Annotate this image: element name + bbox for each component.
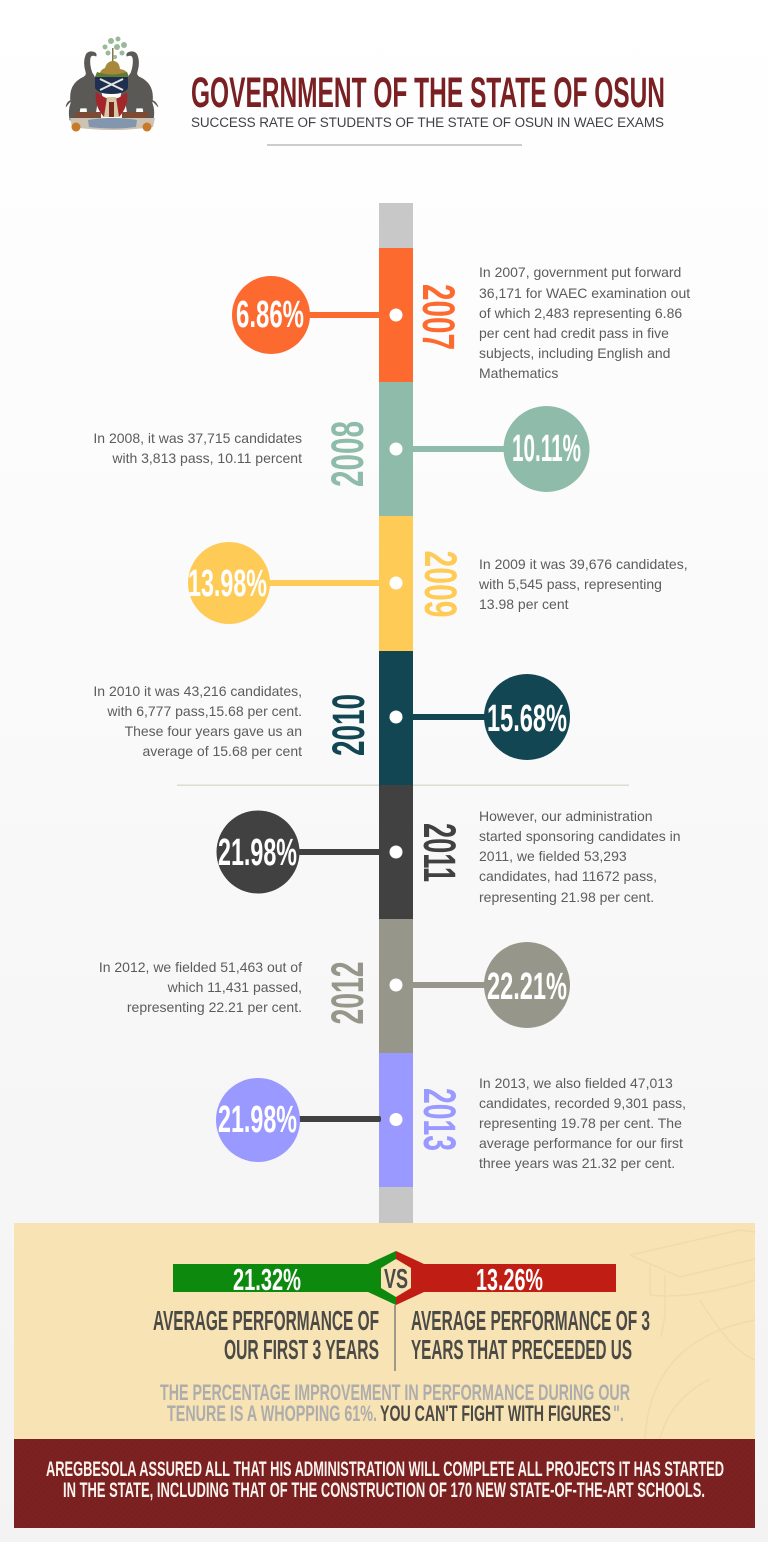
icon: state coat of arms xyxy=(66,36,158,132)
entry: 2008 xyxy=(93,406,590,492)
improvement statement xyxy=(160,1380,630,1426)
entry: 2013: representing 19.78 per cent. The xyxy=(479,1115,682,1131)
entry: 2012: representing 22.21 per cent. xyxy=(127,999,302,1015)
improvement statement: YOU CAN'T FIGHT WITH FIGURES xyxy=(380,1401,611,1426)
header rule xyxy=(267,144,522,146)
bar: our average: 21.32% xyxy=(233,1262,301,1297)
entry: 2013 xyxy=(216,1075,686,1171)
watermark: graduate with cap and globe xyxy=(630,1230,755,1439)
entry: 2007: 2007 xyxy=(413,284,464,350)
improvement statement: ". xyxy=(613,1401,624,1426)
entry: 2013: candidates, recorded 9,301 pass, xyxy=(479,1095,686,1111)
entry: 2009: 13.98 per cent xyxy=(479,596,569,612)
panel: closing statement xyxy=(14,1439,755,1528)
entry: 2013: In 2013, we also fielded 47,013 xyxy=(479,1075,673,1091)
entry: 2008: 2008 xyxy=(322,421,373,487)
entry: 2008: with 3,813 pass, 10.11 percent xyxy=(111,450,302,466)
entry: 2011: However, our administration xyxy=(479,808,653,824)
entry: 2007: of which 2,483 representing 6.86 xyxy=(479,305,682,321)
entry: 2012: 2012 xyxy=(322,962,373,1024)
entry: 2011: candidates, had 11672 pass, xyxy=(479,868,657,884)
entry: 2011: 21.98% xyxy=(218,832,297,874)
mantling xyxy=(96,92,127,117)
entry: 2009: with 5,545 pass, representing xyxy=(478,576,662,592)
badge: versus: VS xyxy=(384,1263,408,1294)
badge: versus xyxy=(381,1259,411,1297)
entry: 2010: In 2010 it was 43,216 candidates, xyxy=(93,683,302,699)
timeline bar xyxy=(379,203,413,1223)
entry: 2009: In 2009 it was 39,676 candidates, xyxy=(479,556,688,572)
entry: 2007: 36,171 for WAEC examination out xyxy=(479,285,690,301)
right elephant xyxy=(120,52,158,120)
entry: 2010: 15.68% xyxy=(487,698,567,740)
entry: 2007: per cent had credit pass in five xyxy=(479,325,669,341)
entry: 2010: with 6,777 pass,15.68 per cent. xyxy=(106,703,302,719)
label: our average xyxy=(153,1305,379,1365)
entry: 2011: 2011 xyxy=(414,823,465,882)
entry: 2009: 2009 xyxy=(415,550,466,618)
entry: 2010 xyxy=(93,674,570,760)
motto ribbon xyxy=(88,118,137,128)
tree xyxy=(102,36,127,72)
entry: 2007: 6.86% xyxy=(236,294,304,336)
entry: 2008: 10.11% xyxy=(512,428,581,470)
shield xyxy=(95,77,128,94)
entry: 2012 xyxy=(99,942,570,1028)
entry: 2010: average of 15.68 per cent xyxy=(142,743,302,759)
entry: 2011: representing 21.98 per cent. xyxy=(479,889,654,905)
entry: 2013: three years was 21.32 per cent. xyxy=(479,1155,675,1171)
hill and crest xyxy=(99,61,128,75)
entry: 2007: Mathematics xyxy=(479,365,558,381)
entry: 2010: 2010 xyxy=(323,694,374,756)
entry: 2009 xyxy=(188,542,688,624)
divider between administrations xyxy=(177,784,379,786)
entry: 2009: 13.98% xyxy=(188,563,267,605)
entry: 2007: In 2007, government put forward xyxy=(479,264,681,280)
entry: 2011: started sponsoring candidates in xyxy=(479,828,681,844)
entry: 2011: 2011, we fielded 53,293 xyxy=(479,848,627,864)
entry: 2012: 22.21% xyxy=(487,966,567,1008)
bar: previous average: 13.26% xyxy=(476,1262,543,1297)
entry: 2007: subjects, including English and xyxy=(479,345,670,361)
entry: 2013: average performance for our first xyxy=(479,1135,683,1151)
bar: our average xyxy=(173,1251,396,1305)
left elephant xyxy=(66,52,103,120)
panel: comparison xyxy=(14,1223,755,1439)
label: our average: AVERAGE PERFORMANCE OF xyxy=(153,1305,379,1336)
label: previous average xyxy=(411,1305,650,1365)
bar: previous average xyxy=(396,1251,616,1305)
entry: 2013: 21.98% xyxy=(218,1099,297,1141)
improvement statement: TENURE IS A WHOPPING 61%. xyxy=(167,1401,377,1426)
entry: 2011 xyxy=(216,808,681,905)
entry: 2008: In 2008, it was 37,715 candidates xyxy=(93,430,302,446)
entry: 2012: which 11,431 passed, xyxy=(167,979,302,995)
entry: 2010: These four years gave us an xyxy=(125,723,302,739)
subtitle: SUCCESS RATE OF STUDENTS OF THE STATE OF OSUN IN WAEC EXAMS xyxy=(191,115,664,130)
label: our average: OUR FIRST 3 YEARS xyxy=(224,1334,379,1365)
entry: 2012: In 2012, we fielded 51,463 out of xyxy=(99,959,302,975)
base xyxy=(75,112,149,119)
centre rule xyxy=(394,1305,396,1371)
entry: 2013: 2013 xyxy=(414,1088,465,1151)
entry: 2007 xyxy=(232,264,690,381)
